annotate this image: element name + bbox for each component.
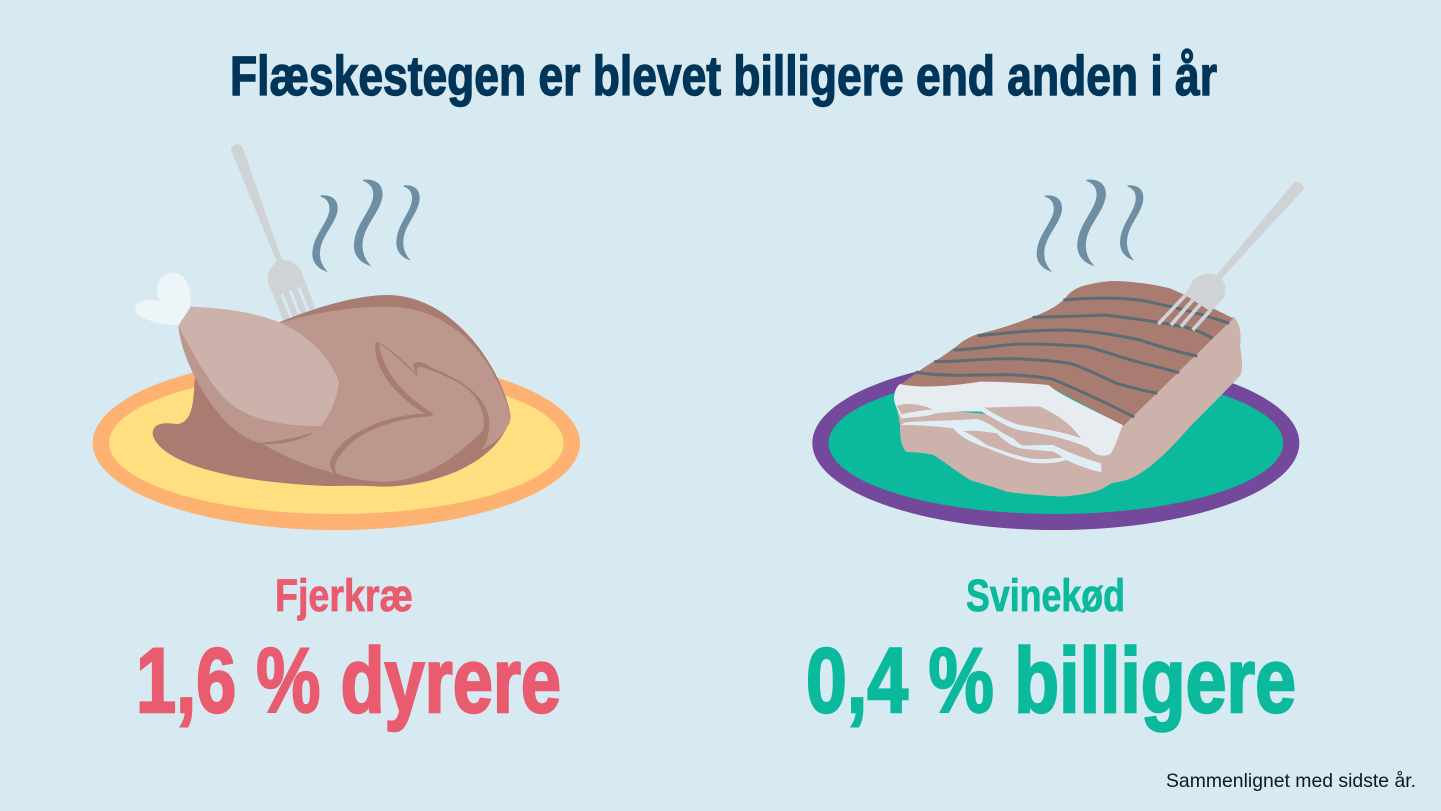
pork meat layers and fat stripes: [897, 404, 1102, 472]
icon: leg bone: [135, 273, 191, 325]
icon: steam: [1037, 180, 1143, 271]
value: 1,6 % dyrere: 1,6 % dyrere: [136, 630, 561, 732]
footnote: Sammenlignet med sidste år.: [1166, 770, 1416, 792]
plate: orange and yellow: [93, 356, 580, 530]
turkey leg: [178, 307, 339, 426]
label: Fjerkræ: Fjerkræ: [275, 570, 413, 621]
plate: purple and green: [812, 356, 1299, 530]
title: Flæskestegen er blevet billigere end anden i år: [230, 44, 1217, 107]
pork fat layer: [894, 382, 1123, 456]
pork top crackling: [900, 281, 1233, 426]
icon: fork: [231, 144, 315, 325]
turkey wing creases: [262, 342, 489, 473]
turkey shadow and underside: [153, 295, 511, 487]
pork meat side: [897, 317, 1242, 497]
icon: steam: [313, 180, 419, 271]
label: Svinekød: Svinekød: [966, 570, 1125, 621]
value: 0,4 % billigere: 0,4 % billigere: [806, 630, 1296, 732]
icon: fork: [1158, 182, 1304, 330]
crackling score lines: [916, 298, 1229, 417]
illustration: roast poultry on plate: [93, 144, 580, 530]
turkey body: [178, 307, 510, 482]
illustration: roast pork on plate: [812, 180, 1304, 530]
